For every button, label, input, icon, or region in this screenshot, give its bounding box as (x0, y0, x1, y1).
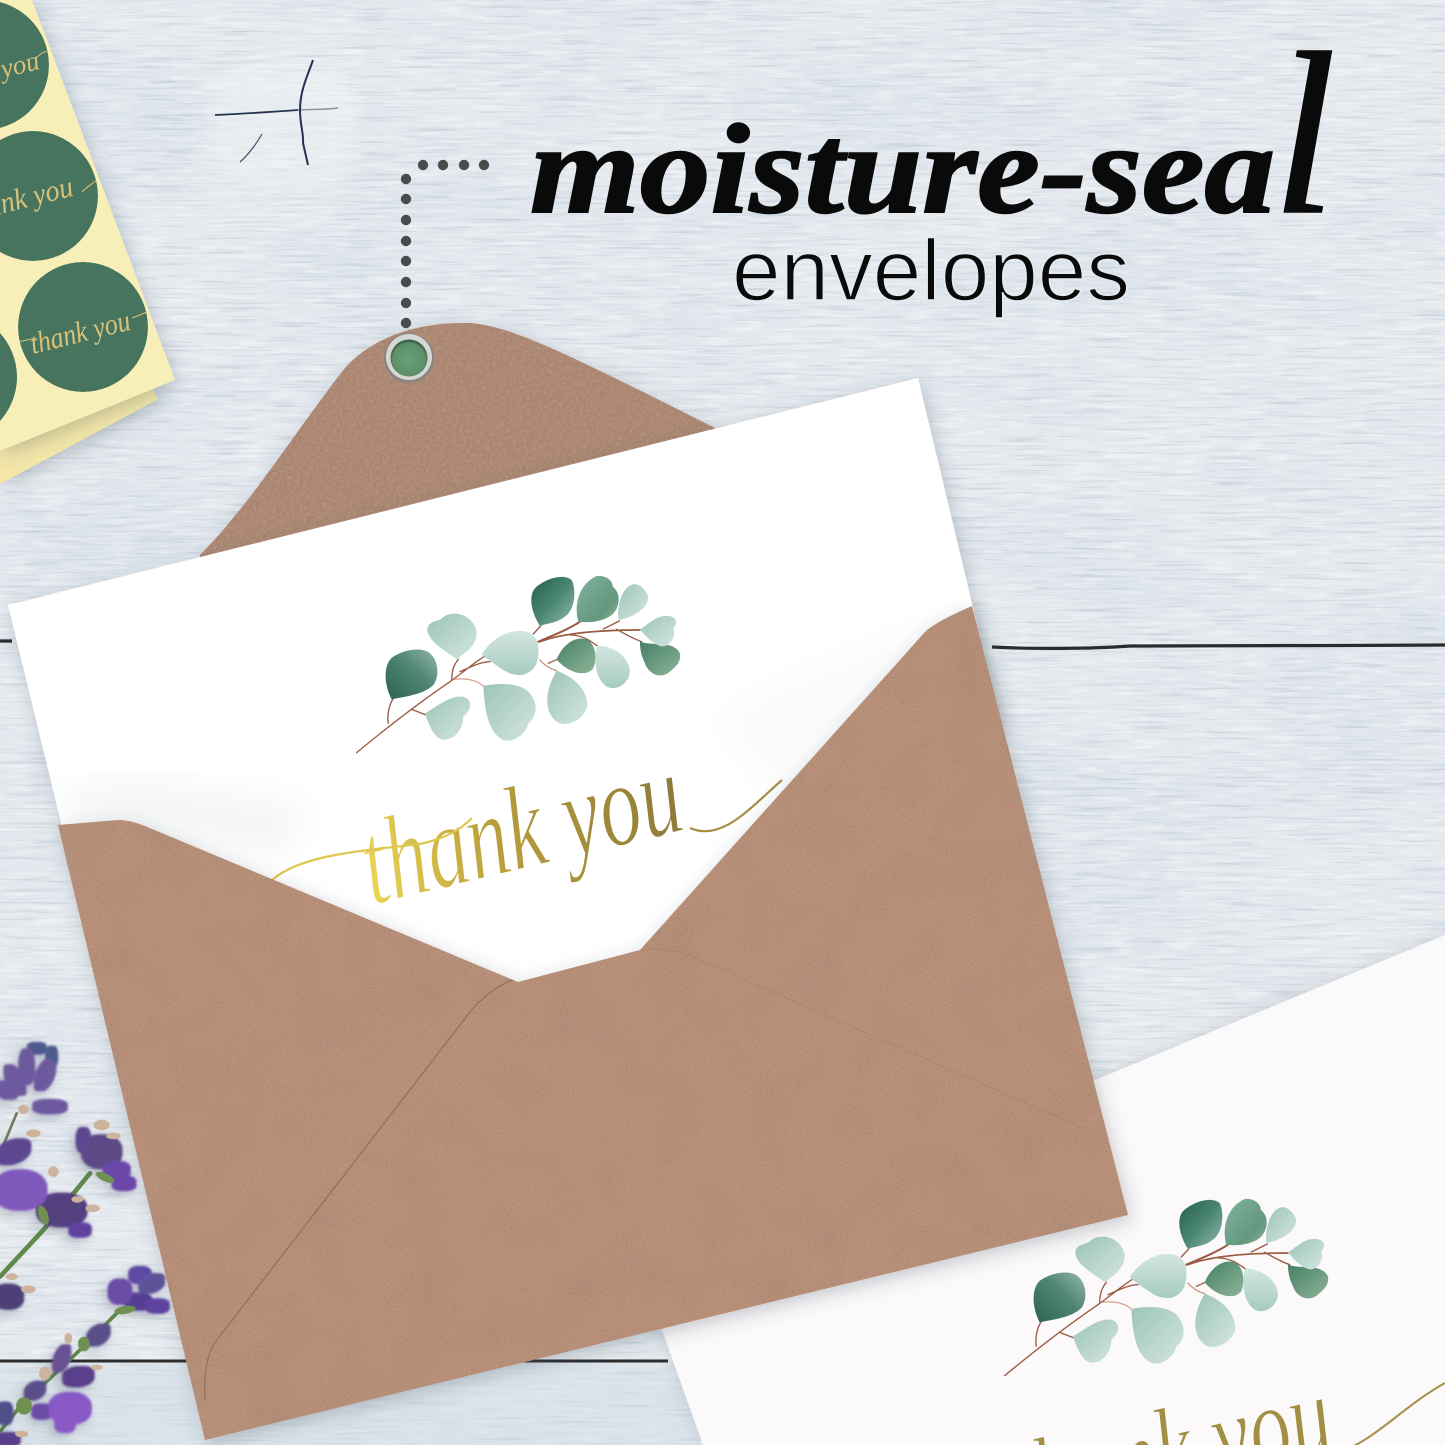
sticker 4 (0, 312, 17, 442)
heading: moisture-seal envelopes (530, 6, 1336, 319)
card leaf illustration (357, 576, 680, 753)
envelope bottom flap seams (205, 949, 1092, 1400)
lavender sprigs (0, 1044, 167, 1444)
sticker 1 (0, 0, 49, 130)
kraft envelope front (50, 600, 1135, 1445)
grommet eyelet (384, 333, 434, 383)
sticker 3: thank you (27, 304, 134, 361)
heading subline: envelopes (732, 223, 1130, 319)
bottom card leaf illustration (1005, 1199, 1328, 1376)
card thank you lettering (272, 725, 782, 930)
sticker sheets (0, 0, 175, 484)
bottom right card (662, 935, 1445, 1445)
card thank you lettering: thank you (347, 725, 694, 930)
heading script line: l (1272, 6, 1336, 263)
dotted leader line (401, 160, 489, 328)
bottom card thank you lettering (1033, 1382, 1445, 1445)
envelope back flap (200, 323, 715, 700)
white thank you card (8, 378, 1000, 1000)
sticker 2 (0, 131, 98, 261)
sticker 3 (18, 262, 148, 392)
heading script line: moisture-sea (530, 98, 1275, 240)
